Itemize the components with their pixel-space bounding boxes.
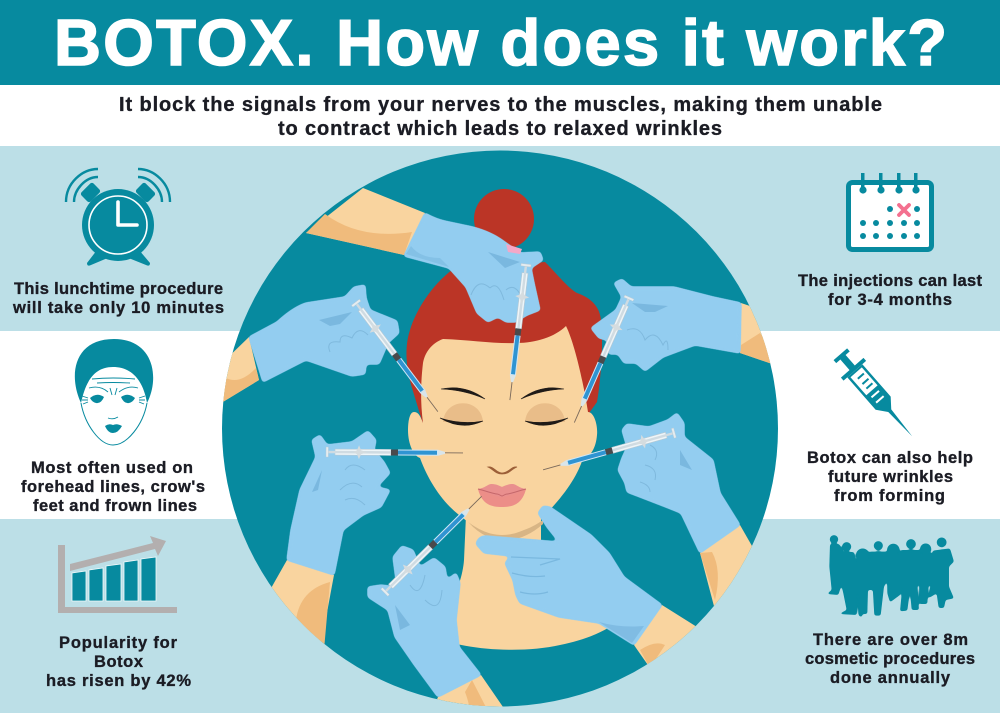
syringe: middle left — [326, 445, 463, 460]
gloved hand: pointing at chin — [476, 506, 662, 645]
text: future wrinkles — [807, 449, 973, 505]
syringe: top — [503, 263, 533, 401]
subtitle: to contract which leads to relaxed wrinkles — [278, 118, 722, 140]
text: popularity — [46, 634, 191, 690]
nose — [488, 467, 517, 474]
eyelids — [443, 403, 565, 422]
text: lunchtime procedure — [12, 280, 224, 317]
hair — [406, 262, 602, 424]
gloved hand: upper right — [591, 279, 741, 371]
eyelashes — [440, 418, 568, 425]
icon: syringe — [829, 344, 923, 446]
text: popularity: Popularity for — [59, 634, 178, 652]
syringe: upper right — [568, 294, 636, 425]
text: forehead lines: feet and frown lines — [33, 497, 197, 515]
text: popularity: Botox — [94, 653, 144, 671]
arms — [215, 188, 790, 713]
text: injections last — [798, 272, 982, 309]
text: cosmetic procedures: There are over 8m — [813, 631, 968, 649]
hair bun — [474, 189, 534, 249]
text: lunchtime procedure: This lunchtime procedure — [14, 280, 223, 298]
gloved hand: middle left — [287, 431, 390, 575]
syringe: upper left — [350, 298, 443, 416]
lips — [478, 484, 526, 507]
text: forehead lines — [21, 459, 205, 515]
text: future wrinkles: future wrinkles — [828, 468, 953, 486]
gloved hand: top — [404, 213, 543, 322]
central illustration circle — [215, 150, 790, 713]
eyebrows — [441, 388, 564, 399]
gloved hand: bottom left — [368, 546, 481, 697]
text: forehead lines: Most often used on — [31, 459, 193, 477]
icon: crowd of people — [827, 535, 954, 617]
text: future wrinkles: from forming — [834, 487, 945, 505]
text: lunchtime procedure: will take only 10 minutes — [12, 299, 224, 317]
syringe: bottom — [379, 491, 487, 598]
text: injections last: The injections can last — [798, 272, 982, 290]
gloved hand: middle right — [618, 413, 740, 553]
icon: calendar — [848, 173, 932, 250]
syringe: middle right — [541, 426, 677, 477]
neck shadow — [465, 518, 543, 541]
text: injections last: for 3-4 months — [828, 291, 952, 309]
subtitle: It block the signals from your nerves to the muscles, making them unable — [119, 94, 882, 116]
woman's face and hair — [406, 189, 608, 650]
gloved hand: upper left — [249, 285, 399, 382]
text: cosmetic procedures: cosmetic procedures — [805, 650, 975, 668]
text: cosmetic procedures — [805, 631, 975, 687]
icon: rising bar chart — [58, 536, 177, 613]
icon: alarm clock — [66, 169, 170, 266]
subtitle — [119, 94, 882, 140]
neck and chest — [430, 515, 608, 650]
text: popularity: has risen by 42% — [46, 672, 191, 690]
title banner: BOTOX. How does it work? — [54, 6, 947, 79]
face — [408, 326, 597, 535]
text: forehead lines: forehead lines, crow's — [21, 478, 205, 496]
bun tie — [506, 244, 522, 254]
text: cosmetic procedures: done annually — [830, 669, 951, 687]
text: future wrinkles: Botox can also help — [807, 449, 973, 467]
icon: face with wrinkles — [75, 339, 153, 445]
